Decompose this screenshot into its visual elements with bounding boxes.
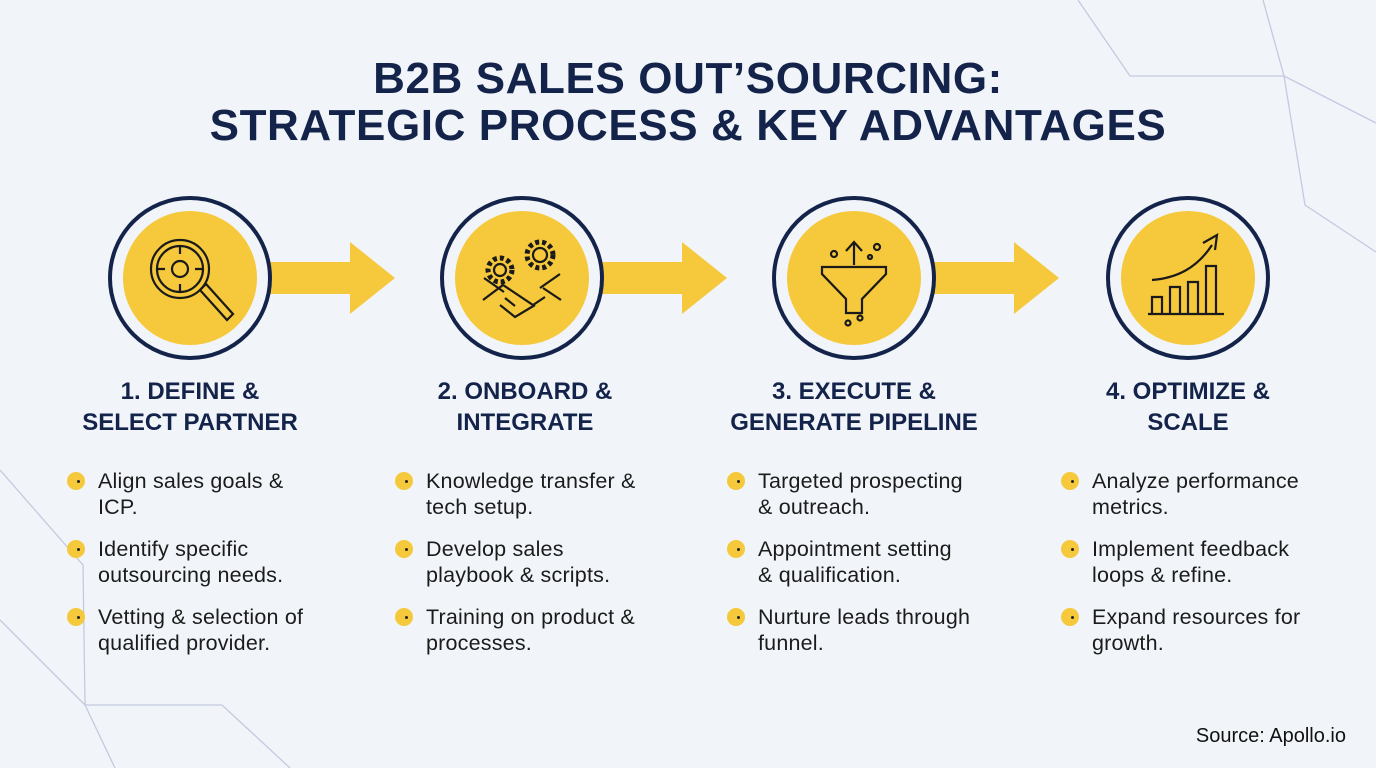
step 3 heading: GENERATE PIPELINE (730, 409, 978, 436)
title: B2B SALES OUT’SOURCING: (373, 54, 1003, 103)
step 1 bullets: Identify specific outsourcing needs. (98, 537, 283, 587)
step 2 heading (438, 378, 612, 436)
step 4 heading (1106, 378, 1270, 436)
step 1 bullets: Vetting & selection of qualified provider. (98, 605, 303, 655)
step 2 heading: INTEGRATE (457, 409, 593, 436)
step 1 heading: SELECT PARTNER (82, 409, 298, 436)
step 2 bullets: Knowledge transfer & tech setup. (426, 469, 636, 519)
step 3 heading (730, 378, 978, 436)
step 4 bullets (1061, 469, 1300, 655)
arrow 1 (240, 242, 395, 314)
icon circle 4 (1108, 198, 1268, 358)
step 4 heading: SCALE (1147, 409, 1229, 436)
step 3 bullets (727, 469, 970, 655)
step 4 heading: 4. OPTIMIZE & (1106, 378, 1270, 405)
step 1 heading: 1. DEFINE & (121, 378, 259, 405)
step 1 bullets (67, 469, 303, 655)
step 4 bullets: Analyze performance metrics. (1092, 469, 1299, 519)
arrow 3 (904, 242, 1059, 314)
step 1 heading (82, 378, 298, 436)
step 2 heading: 2. ONBOARD & (438, 378, 612, 405)
arrow 2 (572, 242, 727, 314)
step 3 bullets: Nurture leads through funnel. (758, 605, 970, 655)
source: Source: Apollo.io (1196, 725, 1346, 747)
step 2 bullets: Develop sales playbook & scripts. (426, 537, 610, 587)
step 4 bullets: Expand resources for growth. (1092, 605, 1300, 655)
step 3 bullets: Targeted prospecting & outreach. (758, 469, 963, 519)
title: STRATEGIC PROCESS & KEY ADVANTAGES (210, 101, 1166, 150)
step 3 bullets: Appointment setting & qualification. (758, 537, 952, 587)
step 4 bullets: Implement feedback loops & refine. (1092, 537, 1289, 587)
step 2 bullets: Training on product & processes. (426, 605, 635, 655)
icon circle 2 (442, 198, 602, 358)
step 3 heading: 3. EXECUTE & (772, 378, 936, 405)
step 1 bullets: Align sales goals & ICP. (98, 469, 283, 519)
step 2 bullets (395, 469, 636, 655)
icon circle 3 (774, 198, 934, 358)
icon circle 1 (110, 198, 270, 358)
title (210, 54, 1166, 150)
